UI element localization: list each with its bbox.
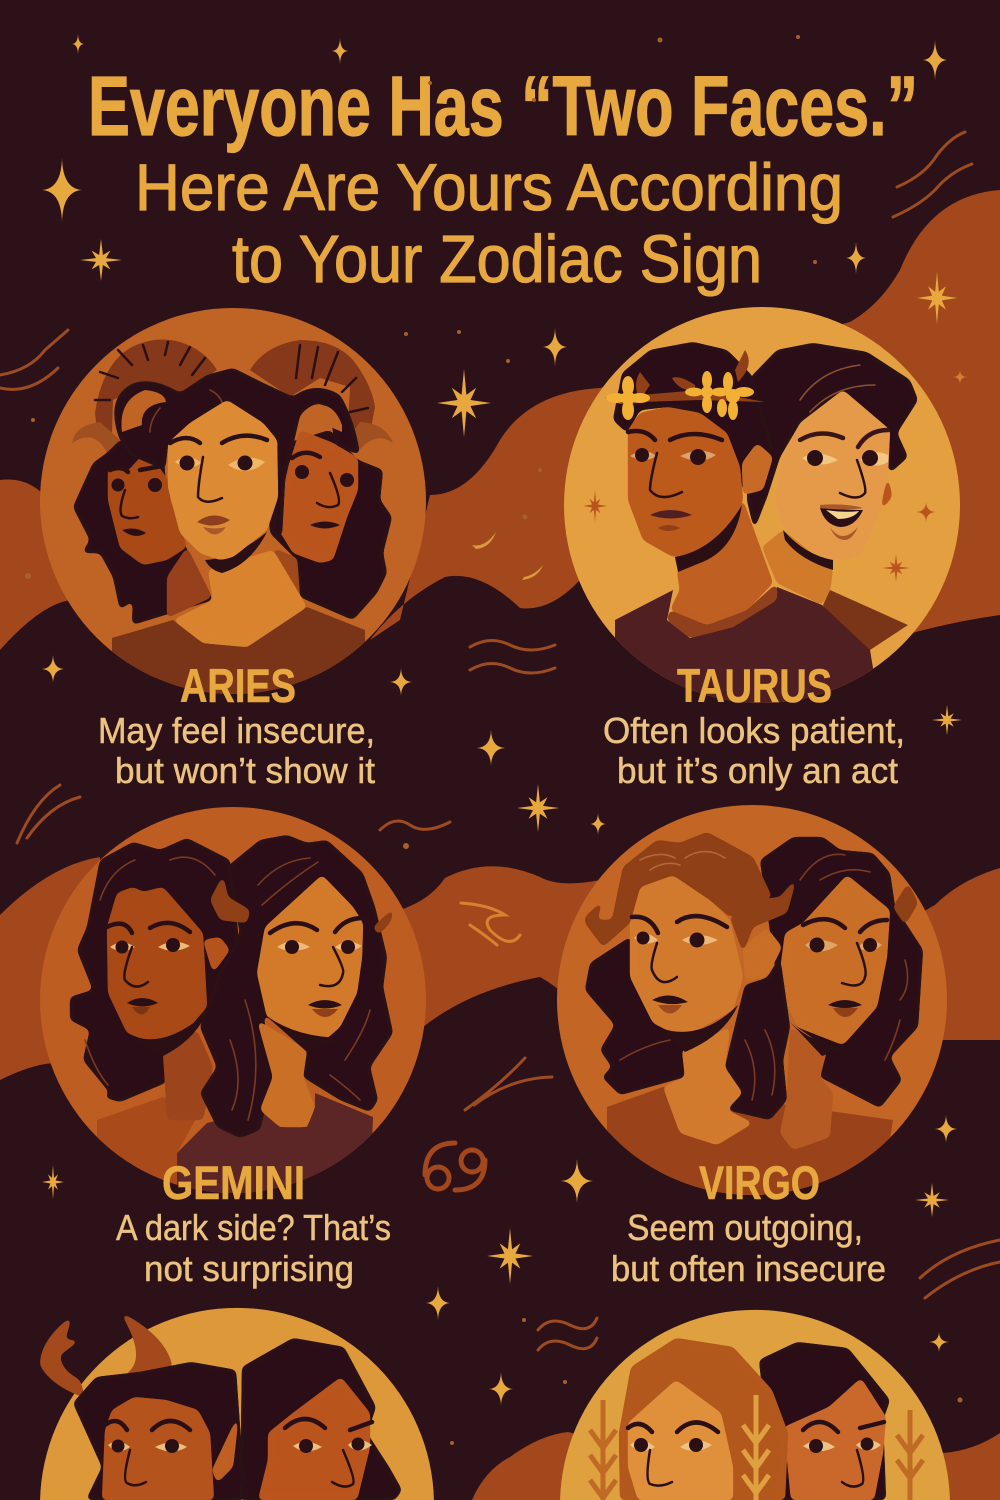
panel: Taurus portrait [564,307,960,710]
side features [110,453,354,536]
label: Gemini [116,1156,391,1289]
horns [40,1312,172,1398]
panel: Libra portrait [560,1310,950,1500]
wheat left [590,1400,616,1500]
wave band: lower [472,1432,1000,1500]
libra features [628,1422,884,1487]
title [88,59,918,297]
neck female [762,530,833,605]
right figure [265,430,392,620]
left figure [68,838,240,1102]
flower crown [605,350,765,420]
face female [775,390,890,560]
wave band: middle [0,857,1000,1080]
centre neck [173,550,307,647]
faces features [107,923,190,933]
left face [628,1380,733,1500]
panel: Scorpio portrait [40,1308,434,1500]
left figure [73,440,213,625]
wheat right [897,1410,923,1500]
shoulders [607,1087,893,1200]
wave band: upper [0,190,1000,660]
label: Taurus: but it’s only an act [617,750,898,791]
shirts [823,590,908,650]
ear [742,443,773,495]
left face [102,1397,214,1500]
hair male [613,342,773,497]
label: Virgo [611,1156,886,1289]
hair top [114,368,360,540]
right hair [240,1338,402,1500]
ear [212,1413,239,1483]
label: Aries: May feel insecure, [98,710,375,751]
shoulders [97,1097,195,1186]
label: Taurus: Often looks patient, [603,710,905,751]
label: Aries [98,659,375,791]
label: Taurus: TAURUS [677,659,832,712]
title: to Your Zodiac Sign [232,222,762,297]
label: Virgo: Seem outgoing, [627,1207,863,1248]
right hair [759,1342,890,1500]
label: Aries: ARIES [180,659,296,712]
label: Virgo: VIRGO [699,1156,820,1209]
title: Here Are Yours According [135,150,843,224]
faces features [105,1419,372,1487]
centre features [170,436,267,534]
small stars [583,490,936,582]
centre face [168,400,278,560]
label: Gemini: not surprising [144,1248,354,1289]
wheat braid [743,1395,769,1500]
left hair [73,1362,245,1500]
neck male [670,500,773,625]
horns [210,880,392,933]
hair female [746,343,918,524]
right figure [200,835,393,1138]
panel: Gemini portrait [40,807,426,1195]
label: Aries: but won’t show it [115,750,375,791]
right face [784,1378,886,1500]
panel: Aries portrait [40,308,426,700]
left hair [619,1338,788,1500]
label: Virgo: but often insecure [611,1248,886,1289]
right face [258,1377,370,1500]
label: Gemini: A dark side? That’s [116,1207,391,1248]
shirt [112,607,365,700]
face male [628,407,743,557]
right figure [760,837,923,1108]
panel: Virgo portrait [557,805,947,1200]
label: Gemini: GEMINI [162,1156,305,1209]
horns [72,340,393,453]
left figure [585,937,690,1095]
label: Taurus [603,659,905,791]
